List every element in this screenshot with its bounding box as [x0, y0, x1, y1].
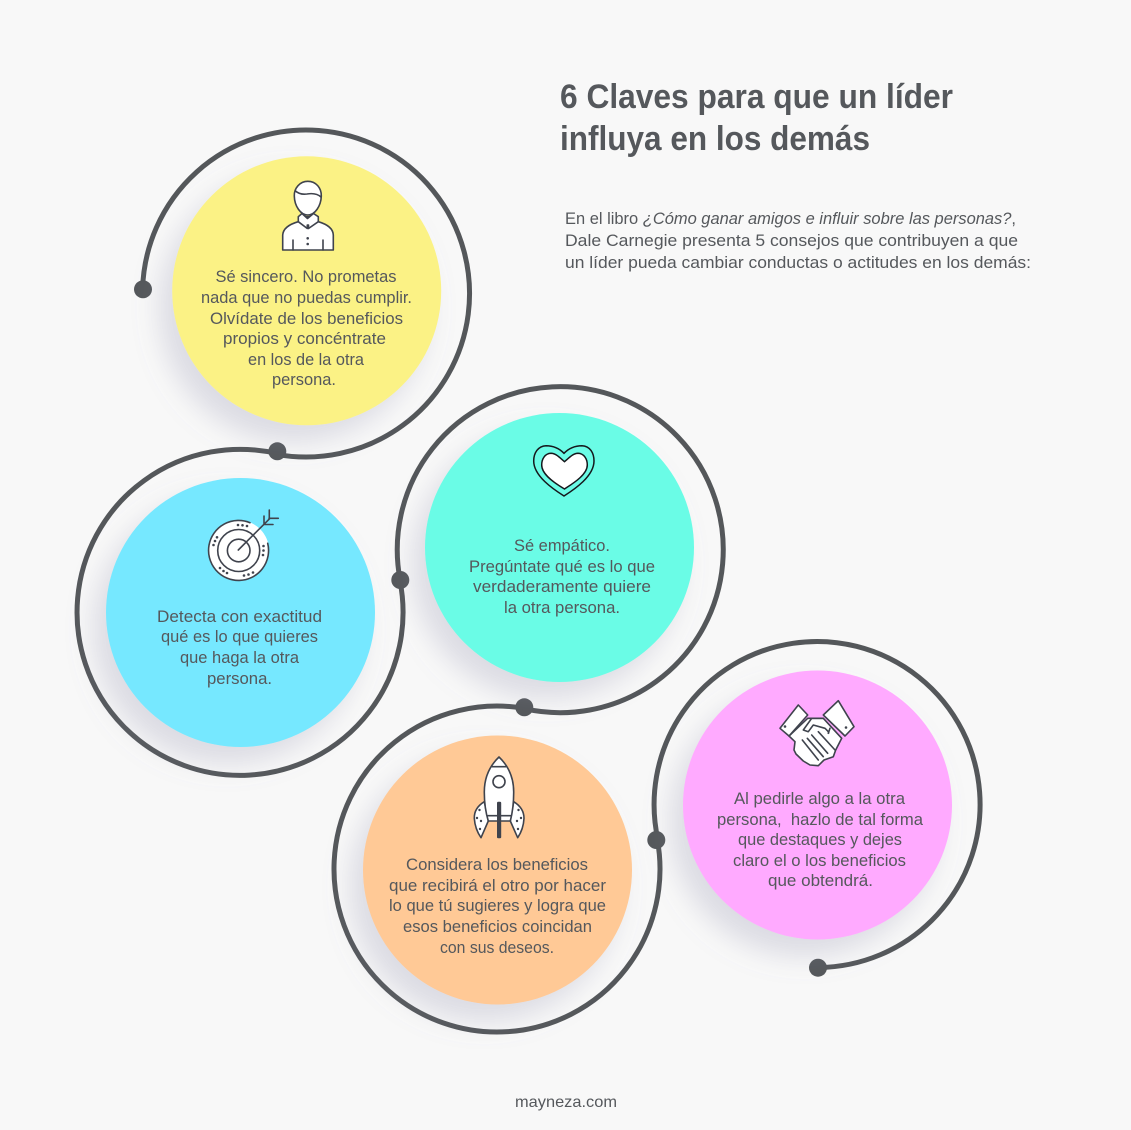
intro text: En el libro ¿Cómo ganar amigos e influir sobre las personas?, — [565, 210, 1016, 228]
text: be sincere: Sé sincero. No prometas — [216, 268, 396, 286]
text: shared benefits: que recibirá el otro por hacer — [389, 877, 607, 895]
intro text: un líder pueda cambiar conductas o actitudes en los demás: — [565, 254, 1031, 272]
text: define the goal: Detecta con exactitud — [157, 608, 322, 626]
text: shared benefits: lo que tú sugieres y logra que — [389, 897, 606, 915]
text: be empathetic: Pregúntate qué es lo que — [469, 558, 655, 576]
text: shared benefits: Considera los beneficios — [406, 856, 588, 874]
text: be sincere: Olvídate de los beneficios — [210, 310, 403, 328]
title — [560, 78, 953, 158]
text: be sincere: persona. — [272, 371, 336, 389]
text: shared benefits — [389, 856, 607, 957]
ring connector dots — [134, 280, 827, 977]
icon: target with arrow — [208, 510, 278, 581]
footer credit: mayneza.com — [515, 1094, 617, 1111]
text: be empathetic: la otra persona. — [504, 599, 620, 617]
text: make the request beneficial: que obtendrá. — [768, 872, 873, 890]
icon: rocket — [474, 757, 524, 838]
text: define the goal: que haga la otra — [180, 649, 300, 667]
title: 6 Claves para que un líder — [560, 78, 953, 116]
text: define the goal — [157, 608, 322, 688]
text: be sincere: propios y concéntrate — [223, 330, 386, 348]
text: define the goal: persona. — [207, 670, 272, 688]
icon: heart — [534, 446, 594, 496]
text: be sincere — [201, 268, 412, 389]
intro text — [565, 210, 1031, 272]
text: make the request beneficial: claro el o los beneficios — [733, 852, 906, 870]
text: define the goal: qué es lo que quieres — [161, 628, 318, 646]
panel: pink circle, make the request beneficial — [683, 670, 952, 940]
icon: handshake — [780, 701, 854, 766]
text: be empathetic: verdaderamente quiere — [473, 578, 651, 596]
text: make the request beneficial — [717, 790, 924, 890]
intro text: Dale Carnegie presenta 5 consejos que contribuyen a que — [565, 232, 1018, 250]
text: make the request beneficial: Al pedirle algo a la otra — [734, 790, 906, 808]
text: shared benefits: con sus deseos. — [440, 939, 554, 957]
panel: orange circle, shared benefits — [363, 736, 632, 1004]
panel: yellow circle, be sincere — [172, 156, 441, 425]
text: be sincere: en los de la otra — [248, 351, 365, 369]
text: shared benefits: esos beneficios coincidan — [403, 918, 592, 936]
text: be empathetic — [469, 537, 655, 617]
text: be empathetic: Sé empático. — [514, 537, 610, 555]
panel: blue circle, define the goal — [106, 478, 375, 747]
text: make the request beneficial: persona, hazlo de tal forma — [717, 811, 924, 829]
icon: person — [283, 181, 333, 250]
title: influya en los demás — [560, 120, 870, 158]
text: be sincere: nada que no puedas cumplir. — [201, 289, 412, 307]
text: make the request beneficial: que destaques y dejes — [738, 831, 902, 849]
connecting ring path — [77, 130, 980, 1032]
panel: green circle, be empathetic — [425, 413, 694, 682]
